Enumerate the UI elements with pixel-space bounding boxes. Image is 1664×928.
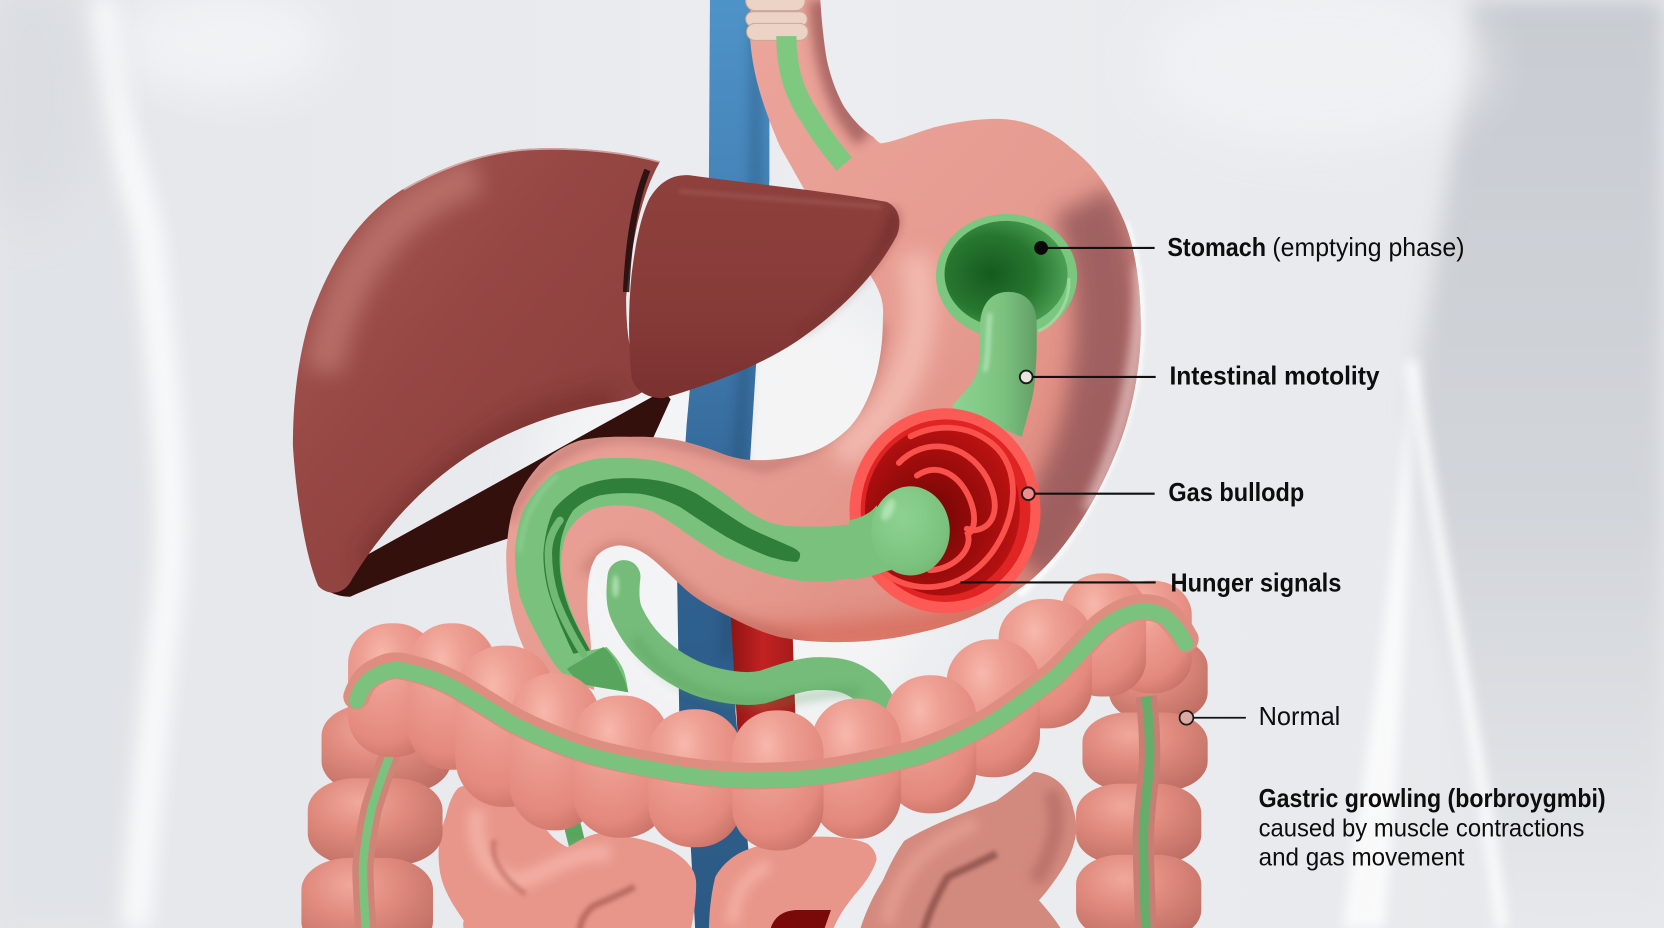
callout: gas buildup [1022, 479, 1304, 507]
descending colon (right) [1076, 637, 1208, 928]
text block: gastric growling explanation [1259, 785, 1606, 871]
callout: hunger signals: Hunger signals [1171, 569, 1341, 597]
stomach and duodenum (pink body) [506, 0, 1141, 690]
callout: normal [1180, 703, 1340, 731]
gas pocket (red spiral disc) [850, 408, 1041, 613]
esophagus inner green lining [786, 36, 844, 164]
callout: stomach emptying phase: (emptying phase) [1272, 234, 1464, 262]
text block: gastric growling explanation: caused by muscle contractions [1259, 815, 1584, 843]
liver: left lobe [293, 148, 671, 597]
green tube from cup to gas pocket [952, 292, 1037, 437]
inferior vena cava (blue vessel) [677, 0, 769, 928]
esophagus rings [746, 0, 808, 40]
text block: gastric growling explanation: and gas movement [1259, 843, 1465, 871]
callout: gas buildup: Gas bullodp [1168, 479, 1304, 507]
transverse colon band with green lining [357, 607, 1185, 780]
callout: stomach emptying phase: Stomach [1167, 234, 1266, 262]
callout: intestinal motility: Intestinal motolity [1169, 362, 1380, 390]
small intestine (lower loops) [439, 772, 1076, 928]
duodenum green channel [515, 458, 891, 692]
text block: gastric growling explanation: Gastric growling (borbroygmbi) [1259, 785, 1606, 813]
callout: normal: Normal [1259, 703, 1340, 731]
callout: intestinal motility [1020, 362, 1380, 390]
ascending colon (left) [301, 704, 451, 928]
transverse colon lobes [348, 573, 1192, 850]
aorta (red vessel) [730, 605, 796, 733]
callout: stomach emptying phase [1034, 234, 1464, 262]
stomach cup (green lining) [936, 214, 1077, 338]
jejunum green tube [612, 574, 877, 703]
green bulb in gas pocket [849, 486, 950, 580]
liver: right lobe [629, 175, 899, 398]
